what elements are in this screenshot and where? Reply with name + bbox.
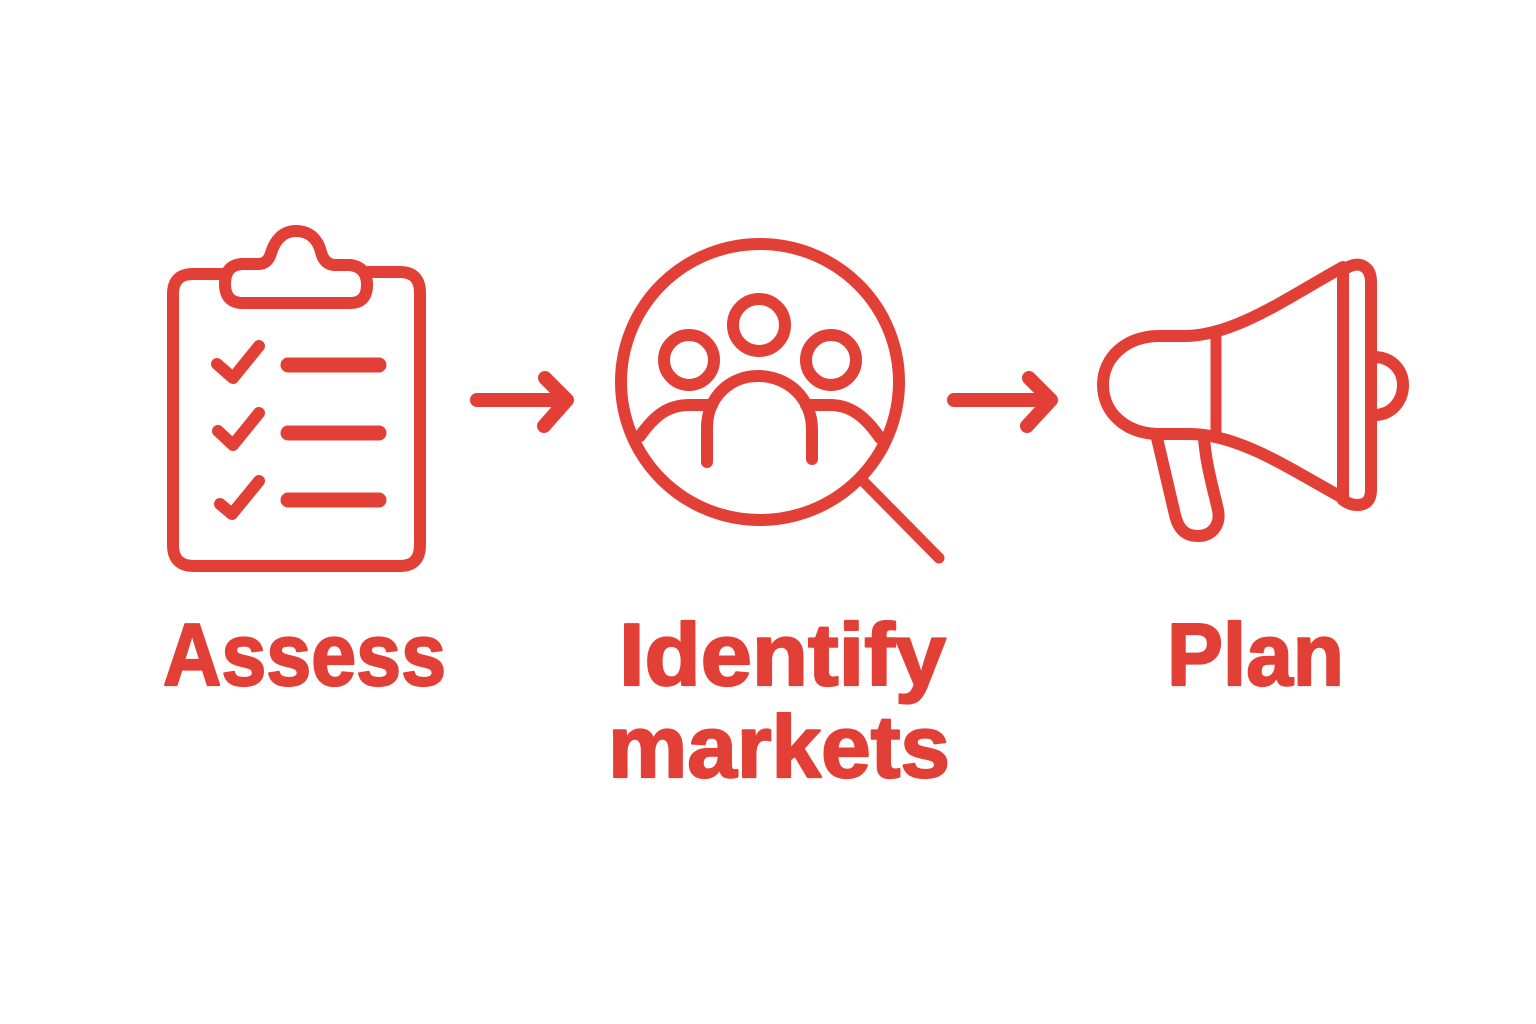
arrow: identify to plan <box>954 378 1051 426</box>
label: Identify markets: Identify <box>619 605 946 704</box>
icon: megaphone <box>1103 265 1403 536</box>
icon: clipboard checklist <box>173 231 420 566</box>
arrow: assess to identify <box>477 378 567 426</box>
label: Plan: Plan <box>1167 605 1344 704</box>
label: Identify markets <box>608 605 950 796</box>
label: Assess: Assess <box>163 605 446 704</box>
icon: magnifier with people <box>621 244 939 558</box>
label: Identify markets: markets <box>608 697 950 796</box>
